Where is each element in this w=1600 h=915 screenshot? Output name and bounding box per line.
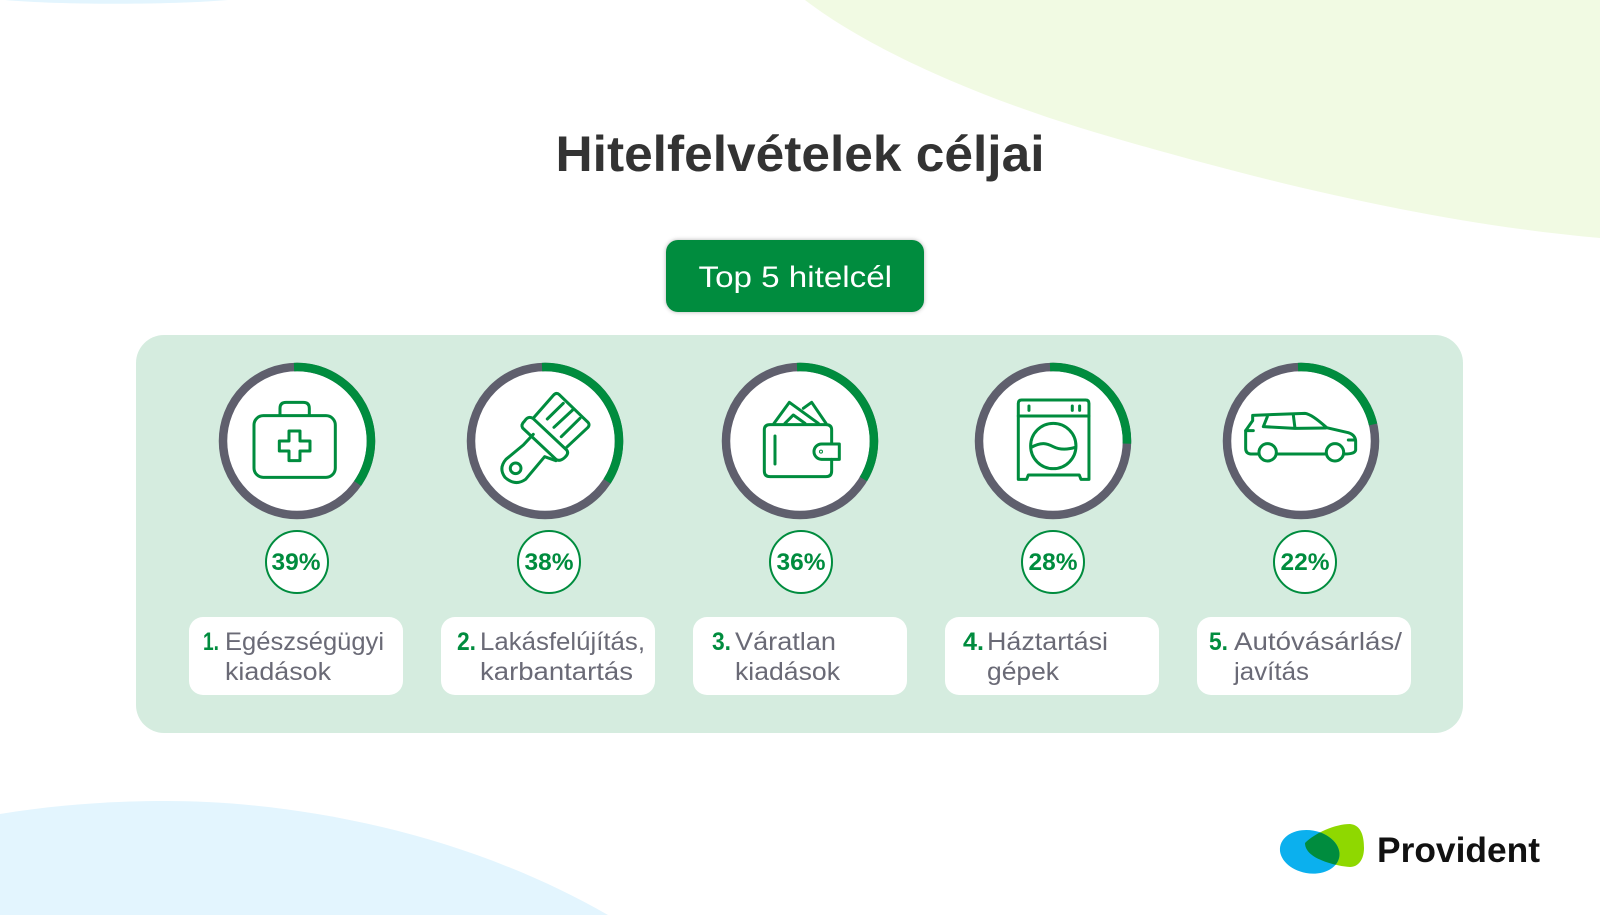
value badge 28% [1022,531,1084,593]
ring chart 39% [223,367,371,515]
label card 1: 1. [203,628,219,656]
label card 4: gépek [987,658,1060,686]
background shape: top-left light blue sliver [5,0,228,4]
label card 2: 2. [457,628,476,656]
button: Top 5 hitelcél: Top 5 hitelcél [698,261,892,294]
background shape: bottom-left light blue [0,801,608,915]
item 1: health [189,367,403,695]
value badge 28%: 28% [1028,549,1078,576]
icon: washing machine [1018,400,1089,479]
icon: car [1246,413,1356,461]
label card 3: Váratlan [735,628,836,656]
ring chart 36% [726,367,874,515]
item 5: car [1197,367,1411,695]
value badge 38% [518,531,580,593]
label card 4: Háztartási [987,628,1108,656]
item 3: unexpected expenses [693,367,907,695]
label card 2: karbantartás [480,658,633,686]
icon: paint brush [502,393,589,483]
background shape: top-right light green [805,0,1600,238]
label card 1 [189,617,403,695]
logo mark [1280,824,1364,874]
value badge 38%: 38% [524,549,574,576]
label card 5: javítás [1233,658,1309,686]
icon: first aid kit [254,402,335,477]
label card 5: Autóvásárlás/ [1234,628,1402,656]
label card 1: Egészségügyi [225,628,384,656]
title: Hitelfelvételek céljai [556,126,1044,182]
value badge 39% [266,531,328,593]
value badge 22% [1274,531,1336,593]
item 2: renovation [441,367,655,695]
ring chart 28% [979,367,1127,515]
value badge 36% [770,531,832,593]
label card 2: Lakásfelújítás, [480,628,645,656]
ring chart 22% [1227,367,1375,515]
label card 1: kiadások [225,658,332,686]
panel: top 5 items [136,335,1463,733]
label card 3: kiadások [735,658,841,686]
value badge 39%: 39% [272,549,320,576]
button: Top 5 hitelcél [666,240,924,312]
value badge 22%: 22% [1280,549,1330,576]
label card 3: 3. [712,628,731,656]
label card 2 [441,617,655,695]
label card 4: 4. [963,628,984,656]
label card 5 [1197,617,1411,695]
item 4: household appliances [945,367,1159,695]
ring chart 38% [471,367,619,515]
icon: wallet [764,402,839,477]
logo: Provident [1276,824,1540,878]
label card 3 [693,617,907,695]
label card 4 [945,617,1159,695]
label card 5: 5. [1209,628,1228,656]
logo wordmark: Provident [1377,831,1540,870]
value badge 36%: 36% [776,549,826,576]
